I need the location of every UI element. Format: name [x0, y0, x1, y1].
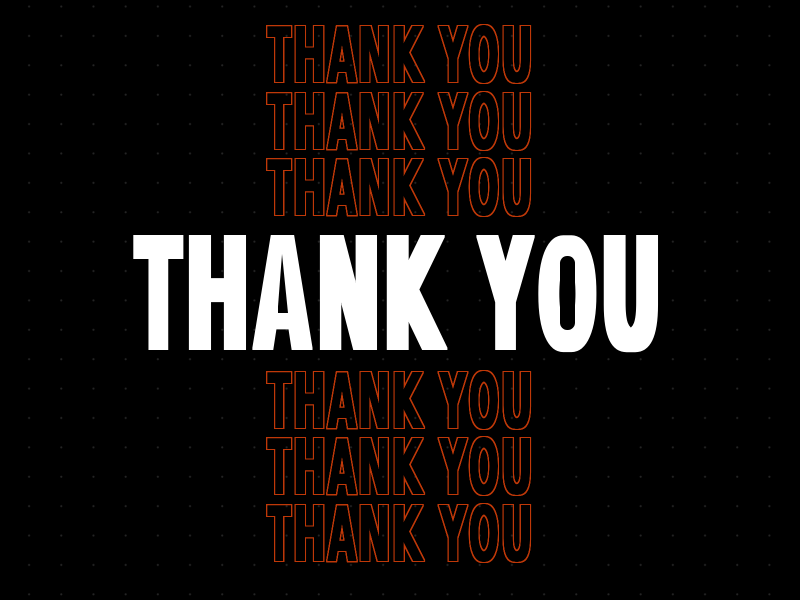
outlined heading row 6: U — [501, 491, 532, 580]
outlined heading row 5: U — [501, 424, 532, 513]
outlined heading row 4: K — [392, 358, 422, 447]
outlined heading row 1 — [266, 12, 532, 101]
outlined heading row 4 — [266, 358, 532, 447]
outlined heading row 4: Y — [440, 358, 466, 447]
outlined heading row 4: N — [358, 358, 391, 447]
outlined heading row 3: A — [328, 145, 356, 234]
outlined heading row 3 — [266, 145, 532, 234]
title: main white heading: T — [137, 205, 179, 386]
outlined heading row 1: K — [392, 12, 422, 101]
outlined heading row 2: U — [501, 79, 532, 168]
outlined heading row 1: T — [268, 12, 290, 101]
title: main white heading: K — [384, 205, 441, 386]
outlined heading row 2: Y — [440, 79, 466, 168]
outlined heading row 4: H — [293, 358, 326, 447]
outlined heading row 5: H — [293, 424, 326, 513]
outlined heading row 4: O — [469, 358, 499, 447]
outlined heading row 2: A — [328, 79, 356, 168]
title: main white heading: A — [256, 205, 309, 386]
title: main white heading: U — [601, 205, 661, 386]
outlined heading row 6: Y — [440, 491, 466, 580]
outlined heading row 6: O — [469, 491, 499, 580]
outlined heading row 5: T — [268, 424, 290, 513]
letter A counter in main heading — [278, 254, 288, 313]
outlined heading row 5: A — [328, 424, 356, 513]
outlined heading row 2: T — [268, 79, 290, 168]
title: main white heading: N — [317, 205, 380, 386]
outlined heading row 5: K — [392, 424, 422, 513]
outlined heading row 3: N — [358, 145, 391, 234]
outlined heading row 6: A — [328, 491, 356, 580]
outlined heading row 6: N — [358, 491, 391, 580]
outlined heading row 5 — [266, 424, 532, 513]
outlined heading row 1: A — [328, 12, 356, 101]
title: main white heading: H — [186, 205, 249, 386]
title: main white heading — [133, 205, 661, 386]
outlined heading row 1: U — [501, 12, 532, 101]
outlined heading row 3: U — [501, 145, 532, 234]
outlined heading row 6: H — [293, 491, 326, 580]
outlined heading row 1: O — [469, 12, 499, 101]
outlined heading row 4: U — [501, 358, 532, 447]
outlined heading row 6 — [266, 491, 532, 580]
outlined heading row 5: O — [469, 424, 499, 513]
title: main white heading: Y — [481, 205, 530, 386]
outlined heading row 1: H — [293, 12, 326, 101]
outlined heading row 1: Y — [440, 12, 466, 101]
outlined heading row 2: H — [293, 79, 326, 168]
outlined heading row 5: Y — [440, 424, 466, 513]
outlined heading row 2: N — [358, 79, 391, 168]
outlined heading row 1: N — [358, 12, 391, 101]
outlined heading row 2: K — [392, 79, 422, 168]
outlined heading row 5: N — [358, 424, 391, 513]
outlined heading row 3: H — [293, 145, 326, 234]
outlined heading row 2 — [266, 79, 532, 168]
outlined heading row 2: O — [469, 79, 499, 168]
outlined heading row 4: A — [328, 358, 356, 447]
outlined heading row 3: Y — [440, 145, 466, 234]
title: main white heading: O — [539, 208, 595, 385]
outlined heading row 4: T — [268, 358, 290, 447]
outlined heading row 3: O — [469, 145, 499, 234]
outlined heading row 6: K — [392, 491, 422, 580]
outlined heading row 3: T — [268, 145, 290, 234]
outlined heading row 3: K — [392, 145, 422, 234]
letter O counter in main heading — [560, 256, 574, 330]
outlined heading row 6: T — [268, 491, 290, 580]
